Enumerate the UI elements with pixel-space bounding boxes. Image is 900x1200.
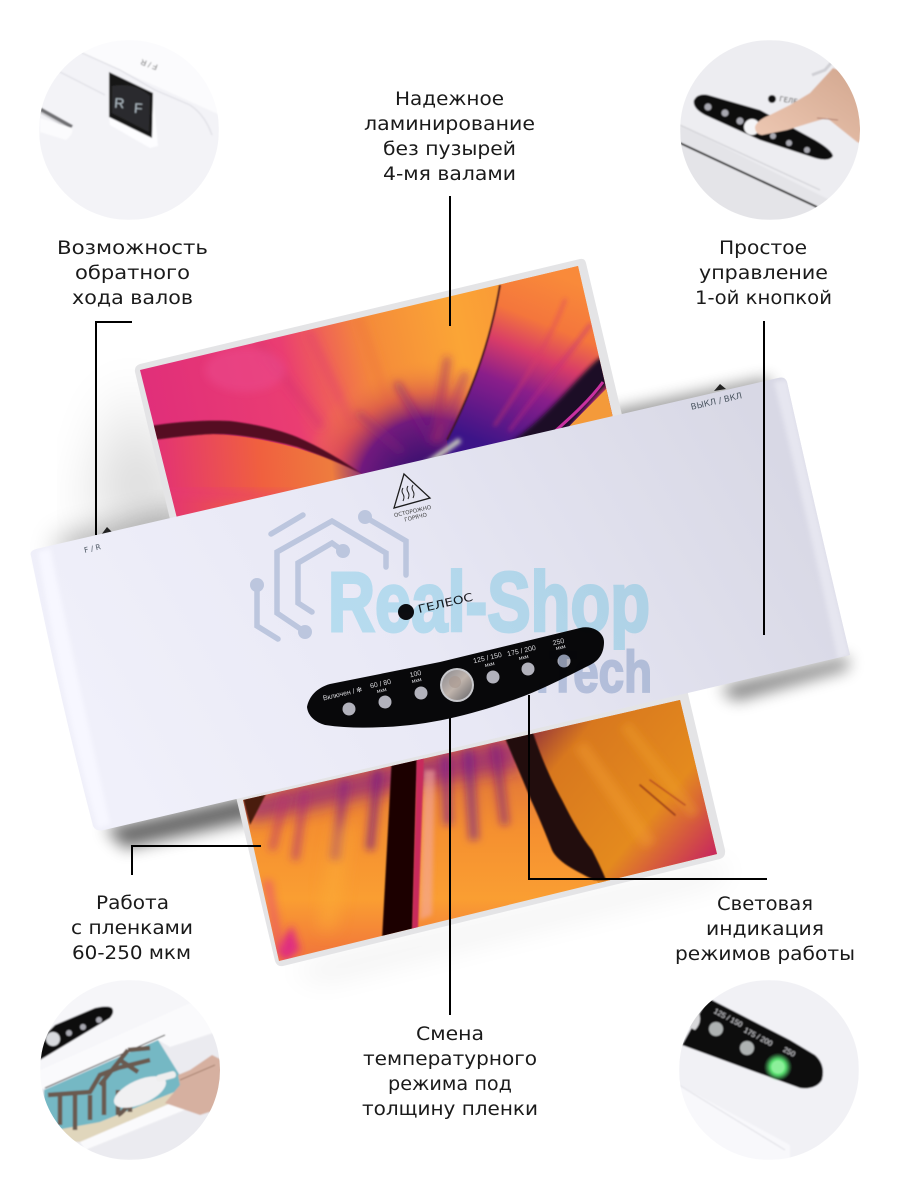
forward/reverse label: F / R: [83, 542, 102, 555]
mode labels: мкм: [411, 677, 423, 685]
soft shadows behind paper and laminator: [60, 378, 848, 980]
mode labels: 100: [409, 670, 422, 679]
text: temperature: режима под: [388, 1073, 512, 1095]
right petal with dark curved edge: [525, 695, 725, 885]
text: reverse: хода валов: [72, 287, 193, 309]
leader line: indicators: [529, 695, 767, 879]
mode indicators: [342, 654, 570, 716]
leader line: temperature: [449, 718, 451, 1015]
leader line: reverse: [96, 322, 132, 535]
text: control: [695, 237, 832, 309]
text: temperature: Смена: [416, 1023, 484, 1045]
power knob: [440, 668, 474, 702]
text: temperature: температурного: [363, 1048, 537, 1070]
photo circle: green indicator: 175 / 200: [742, 1025, 774, 1048]
laminated sheet: frame: [135, 259, 725, 966]
mode labels: 125 / 150: [473, 652, 503, 665]
hot surface warning icon: ОСТОРОЖНО: [394, 505, 433, 519]
left end cap highlight: [42, 553, 56, 596]
photo circle: finger on button: ГЕЛЕОС: [779, 95, 808, 108]
lower left petal: [156, 434, 362, 516]
black vertical stripe: [382, 755, 417, 940]
right end cap highlight: [774, 379, 850, 659]
hot surface warning icon: ГОРЯЧО: [404, 512, 428, 524]
text: rollers: ламинирование: [364, 113, 535, 135]
hot surface warning icon: [394, 474, 433, 524]
text: control: управление: [699, 262, 828, 284]
photo circle: reverse switch: R: [114, 95, 125, 111]
brand logo: [398, 591, 475, 620]
purple fade under the laminator: [240, 735, 520, 822]
text: indicators: индикация: [706, 918, 824, 940]
leader line: control: [763, 321, 765, 635]
leader line: rollers: [449, 196, 451, 326]
text: film thickness: Работа: [96, 892, 169, 914]
right petal: [447, 266, 612, 454]
text: reverse: [57, 237, 208, 309]
mode labels: [322, 638, 567, 702]
text: temperature: толщину пленки: [362, 1098, 538, 1120]
mode labels: мкм: [555, 644, 567, 652]
laminator body: [31, 378, 850, 830]
laminated sheet: flower image, lower part: [235, 695, 730, 970]
text: indicators: [675, 893, 855, 965]
photo circle: finger on button: [680, 40, 865, 220]
mode labels: 60 / 80: [369, 679, 392, 690]
dark petal edge: [447, 285, 500, 440]
text: reverse: обратного: [75, 262, 190, 284]
text: rollers: Надежное: [395, 88, 504, 110]
photo circle: green indicator: 250: [782, 1045, 797, 1059]
mode labels: 175 / 200: [507, 645, 537, 658]
dark streak and corner: [509, 355, 606, 440]
text: rollers: 4-мя валами: [383, 163, 516, 185]
text: film thickness: [71, 892, 193, 964]
text: reverse: Возможность: [57, 237, 208, 259]
watermark: circuit house icon: [250, 510, 406, 639]
text: film thickness: с пленками: [71, 917, 193, 939]
photo circle: reverse switch: [38, 40, 220, 220]
text: rollers: [364, 88, 535, 185]
text: indicators: Световая: [717, 893, 813, 915]
mode labels: Включен / ✻: [322, 686, 363, 702]
text: film thickness: 60-250 мкм: [72, 942, 191, 964]
brand logo: ГЕЛЕОС: [417, 591, 475, 616]
text: indicators: режимов работы: [675, 943, 855, 965]
mode labels: мкм: [376, 687, 388, 695]
control panel: [307, 627, 604, 728]
small switch bumps behind laminator: [101, 384, 726, 535]
photo circle: green indicator: 125 / 150: [712, 1006, 744, 1029]
mode labels: мкм: [518, 654, 530, 662]
photo circle: green indicator: [679, 980, 859, 1160]
photo circle: reverse switch: F / R: [139, 57, 159, 72]
text: rollers: без пузырей: [383, 138, 516, 160]
leader line: film thickness: [132, 846, 261, 875]
photo circle: laminating a card: [40, 980, 222, 1160]
text: control: Простое: [719, 237, 807, 259]
text: temperature: [362, 1023, 538, 1120]
watermark: .Tech: .Tech: [536, 640, 652, 705]
dark curved band: [130, 421, 362, 474]
mode labels: мкм: [484, 661, 496, 669]
text: control: 1-ой кнопкой: [695, 287, 832, 309]
mode labels: 250: [552, 638, 565, 647]
on/off label: ВЫКЛ / ВКЛ: [690, 391, 743, 413]
watermark: Real-Shop: Real-Shop: [328, 555, 650, 649]
laminated sheet: flower image, upper part: [140, 266, 613, 517]
photo circle: reverse switch: F: [134, 100, 143, 116]
